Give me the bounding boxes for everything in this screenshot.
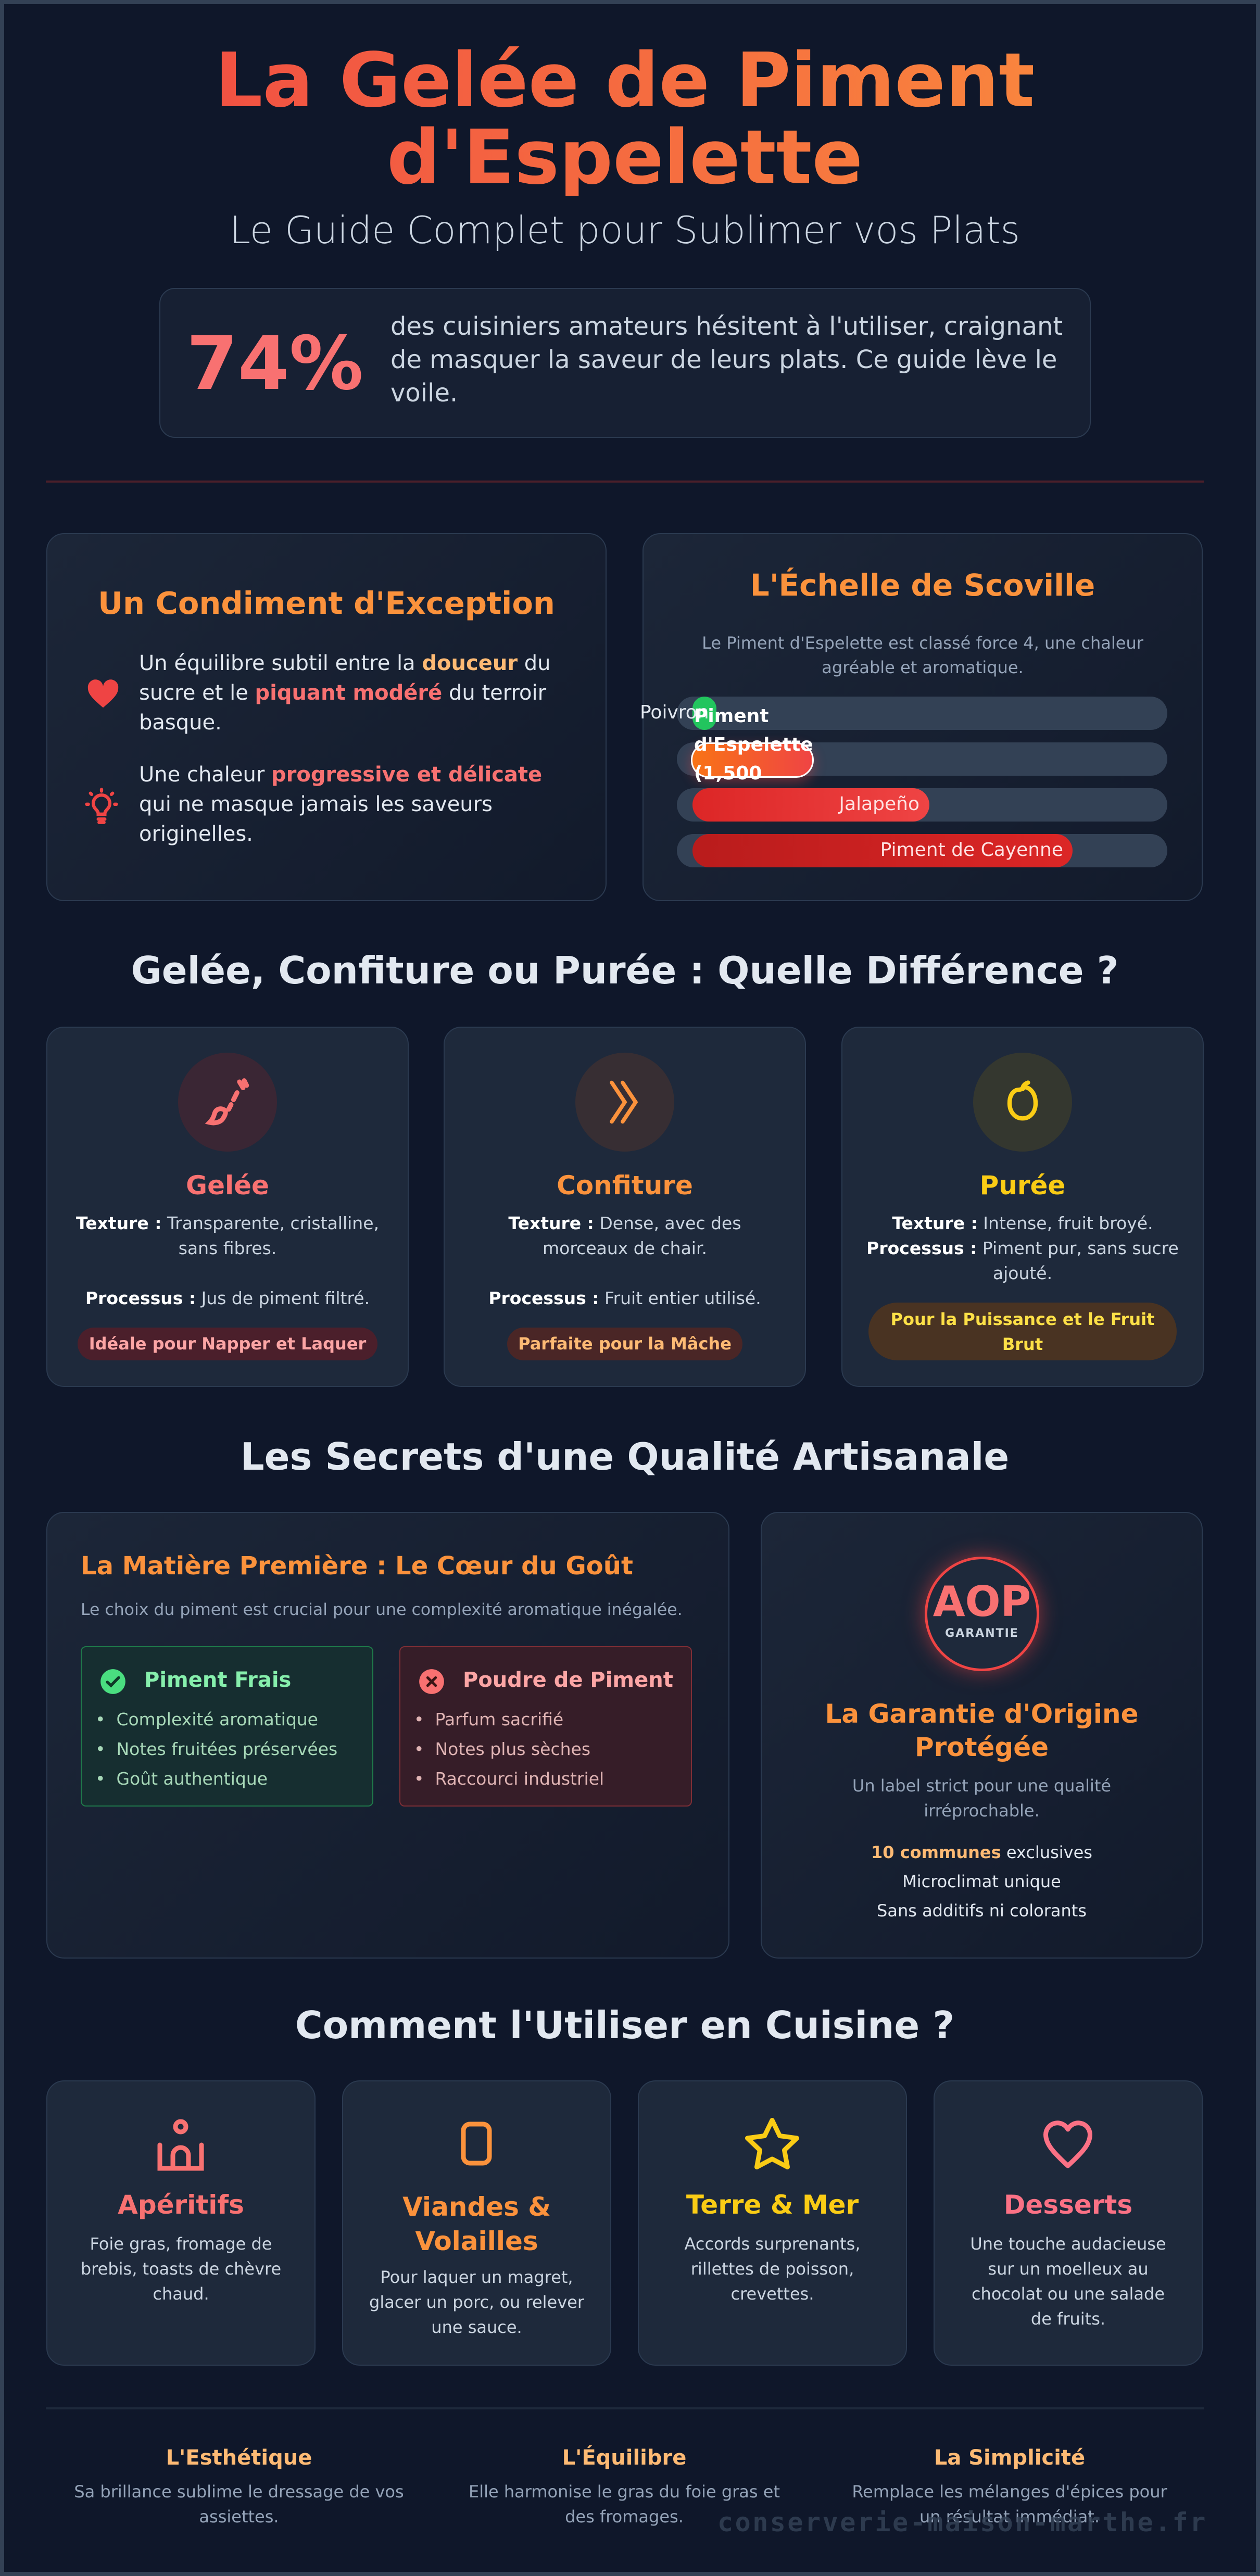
pill: Idéale pour Napper et Laquer: [89, 1334, 366, 1354]
title: La Gelée de Piment: [215, 36, 1035, 124]
stat text: des cuisiniers amateurs hésitent à l'utiliser, craignant de masquer la saveur de leurs plats. Ce guide lève le voile.: [390, 312, 1063, 408]
text: balance: Un équilibre subtil entre la douceur du sucre et le piquant modéré du terroir basque.: [139, 651, 551, 735]
stat number: 74%: [186, 321, 363, 407]
description: Le choix du piment est crucial pour une complexité aromatique inégalée.: [81, 1600, 683, 1619]
pill: [78, 1328, 377, 1360]
panel: aop: [761, 1512, 1203, 1959]
footer: equilibre: [469, 2445, 780, 2527]
text: [866, 1213, 1179, 1283]
box: piment frais: • Goût authentique: [95, 1769, 268, 1789]
text: Texture : Intense, fruit broyé.: [892, 1213, 1153, 1233]
icon: cross: [419, 1669, 444, 1694]
icon: check: [100, 1669, 125, 1694]
icon: rectangle: [461, 2122, 492, 2166]
description: irréprochable.: [924, 1801, 1040, 1821]
description: Un label strict pour une qualité: [852, 1776, 1111, 1796]
text: [488, 1213, 761, 1308]
footer: simplicite: [852, 2446, 1167, 2527]
bar chart: [640, 697, 1167, 867]
pill: [868, 1303, 1177, 1360]
list: 10 communes exclusives: [871, 1842, 1092, 1862]
pill: [507, 1328, 742, 1360]
panel: confiture: [444, 1027, 806, 1387]
list: Sans additifs ni colorants: [877, 1901, 1087, 1921]
card: aperitifs: Apéritifs: [118, 2190, 244, 2220]
bar chart: Poivron: [640, 702, 709, 723]
footer: simplicite: La Simplicité: [934, 2446, 1085, 2470]
text: Texture : Dense, avec des morceaux de chair.: [508, 1213, 741, 1258]
card: desserts: Desserts: [1004, 2190, 1132, 2220]
bar: jalapeno: [692, 788, 929, 822]
title: Gelée: [186, 1170, 269, 1201]
description: [852, 1776, 1111, 1821]
card: terre et mer: Accords surprenants, rillettes de poisson, crevettes.: [685, 2234, 860, 2304]
title: d'Espelette: [387, 113, 863, 201]
bar: poivron: [692, 697, 716, 730]
subtitle: Le Guide Complet pour Sublimer vos Plats: [230, 208, 1020, 252]
bar chart: Piment: [694, 705, 768, 727]
list: [871, 1842, 1092, 1921]
bar chart: Jalapeño: [839, 793, 919, 815]
panel: puree: [841, 1027, 1204, 1387]
heading: secrets: Les Secrets d'une Qualité Artisanale: [241, 1435, 1009, 1479]
description: Le Piment d'Espelette est classé force 4, une chaleur agréable et aromatique.: [702, 633, 1143, 677]
text: Processus : Piment pur, sans sucre ajouté.: [866, 1238, 1179, 1283]
heading: Un Condiment d'Exception: [98, 585, 555, 621]
bar: espelette: [691, 742, 814, 778]
box: piment frais: [81, 1646, 373, 1807]
box: poudre: • Raccourci industriel: [414, 1769, 604, 1789]
footer: esthetique: L'Esthétique: [166, 2446, 312, 2470]
title: Confiture: [557, 1170, 693, 1201]
heading: difference: Gelée, Confiture ou Purée : Quelle Différence ?: [131, 949, 1118, 992]
bar: cayenne: [692, 834, 1073, 867]
title: Protégée: [915, 1732, 1049, 1762]
card: viandes: Viandes &: [402, 2192, 551, 2222]
icon: brush: [178, 1053, 277, 1152]
title: La Garantie d'Origine: [825, 1699, 1138, 1729]
card: desserts: Une touche audacieuse sur un moelleux au chocolat ou une salade de fruits.: [970, 2234, 1166, 2329]
text: Processus : Jus de piment filtré.: [85, 1288, 370, 1308]
panel: scoville: [642, 533, 1203, 901]
text: Processus : Fruit entier utilisé.: [488, 1288, 761, 1308]
box: poudre: [399, 1646, 692, 1807]
box: poudre: Poudre de Piment: [463, 1668, 673, 1692]
box: poudre: • Parfum sacrifié: [414, 1709, 563, 1729]
heading: L'Échelle de Scoville: [750, 567, 1095, 603]
icon: fruit: [973, 1053, 1072, 1152]
card: desserts: [934, 2080, 1203, 2366]
heading: La Matière Première : Le Cœur du Goût: [81, 1551, 633, 1581]
title: Purée: [980, 1170, 1065, 1201]
icon: heart outline: [1043, 2120, 1092, 2168]
box: piment frais: • Notes fruitées préservées: [95, 1739, 337, 1759]
panel: matiere premiere: [46, 1512, 729, 1959]
icon: chevrons: [575, 1053, 674, 1152]
bar chart: Piment de Cayenne: [880, 839, 1063, 861]
icon: aop badge: AOP: [933, 1577, 1031, 1626]
pill: Pour la Puissance et le Fruit Brut: [891, 1309, 1154, 1354]
icon: heart: [87, 679, 119, 708]
icon: aperitif: [157, 2119, 204, 2171]
title: [825, 1699, 1138, 1762]
footer: esthetique: [74, 2446, 404, 2527]
text: [76, 1213, 379, 1308]
card: viandes: Pour laquer un magret, glacer un porc, ou relever une sauce.: [369, 2267, 584, 2337]
panel: condiment: [46, 533, 607, 901]
bar chart: (1,500: [694, 763, 762, 784]
stat box: [159, 288, 1091, 438]
box: piment frais: Piment Frais: [144, 1668, 291, 1692]
watermark: conserverie-maison-marthe.fr: [717, 2507, 1207, 2537]
card: viandes: [342, 2080, 611, 2366]
text: heat: Une chaleur progressive et délicate qui ne masque jamais les saveurs originelles.: [139, 763, 542, 846]
footer: equilibre: Elle harmonise le gras du foie gras et des fromages.: [469, 2482, 780, 2527]
pill: Parfaite pour la Mâche: [518, 1334, 732, 1354]
title: [0, 42, 1251, 196]
box: poudre: • Notes plus sèches: [414, 1739, 590, 1759]
card: terre et mer: Terre & Mer: [686, 2190, 859, 2220]
card: aperitifs: Foie gras, fromage de brebis, toasts de chèvre chaud.: [81, 2234, 281, 2304]
heading: usage: Comment l'Utiliser en Cuisine ?: [295, 2003, 954, 2047]
panel: gelee: [46, 1027, 409, 1387]
icon: aop badge: [925, 1557, 1039, 1671]
icon: bulb: [85, 788, 118, 824]
list: Microclimat unique: [902, 1872, 1061, 1891]
icon: aop badge: GARANTIE: [945, 1627, 1019, 1640]
card: viandes: Volailles: [415, 2226, 538, 2256]
box: piment frais: • Complexité aromatique: [95, 1709, 318, 1729]
card: aperitifs: [46, 2080, 316, 2366]
footer: equilibre: L'Équilibre: [562, 2446, 686, 2470]
card: terre et mer: [638, 2080, 907, 2366]
text: Texture : Transparente, cristalline, sans fibres.: [76, 1213, 379, 1258]
footer: esthetique: Sa brillance sublime le dressage de vos assiettes.: [74, 2482, 404, 2527]
icon: star: [745, 2118, 799, 2169]
footer: simplicite: Remplace les mélanges d'épices pour un résultat immédiat.: [852, 2482, 1167, 2527]
bar chart: d'Espelette: [694, 734, 813, 755]
